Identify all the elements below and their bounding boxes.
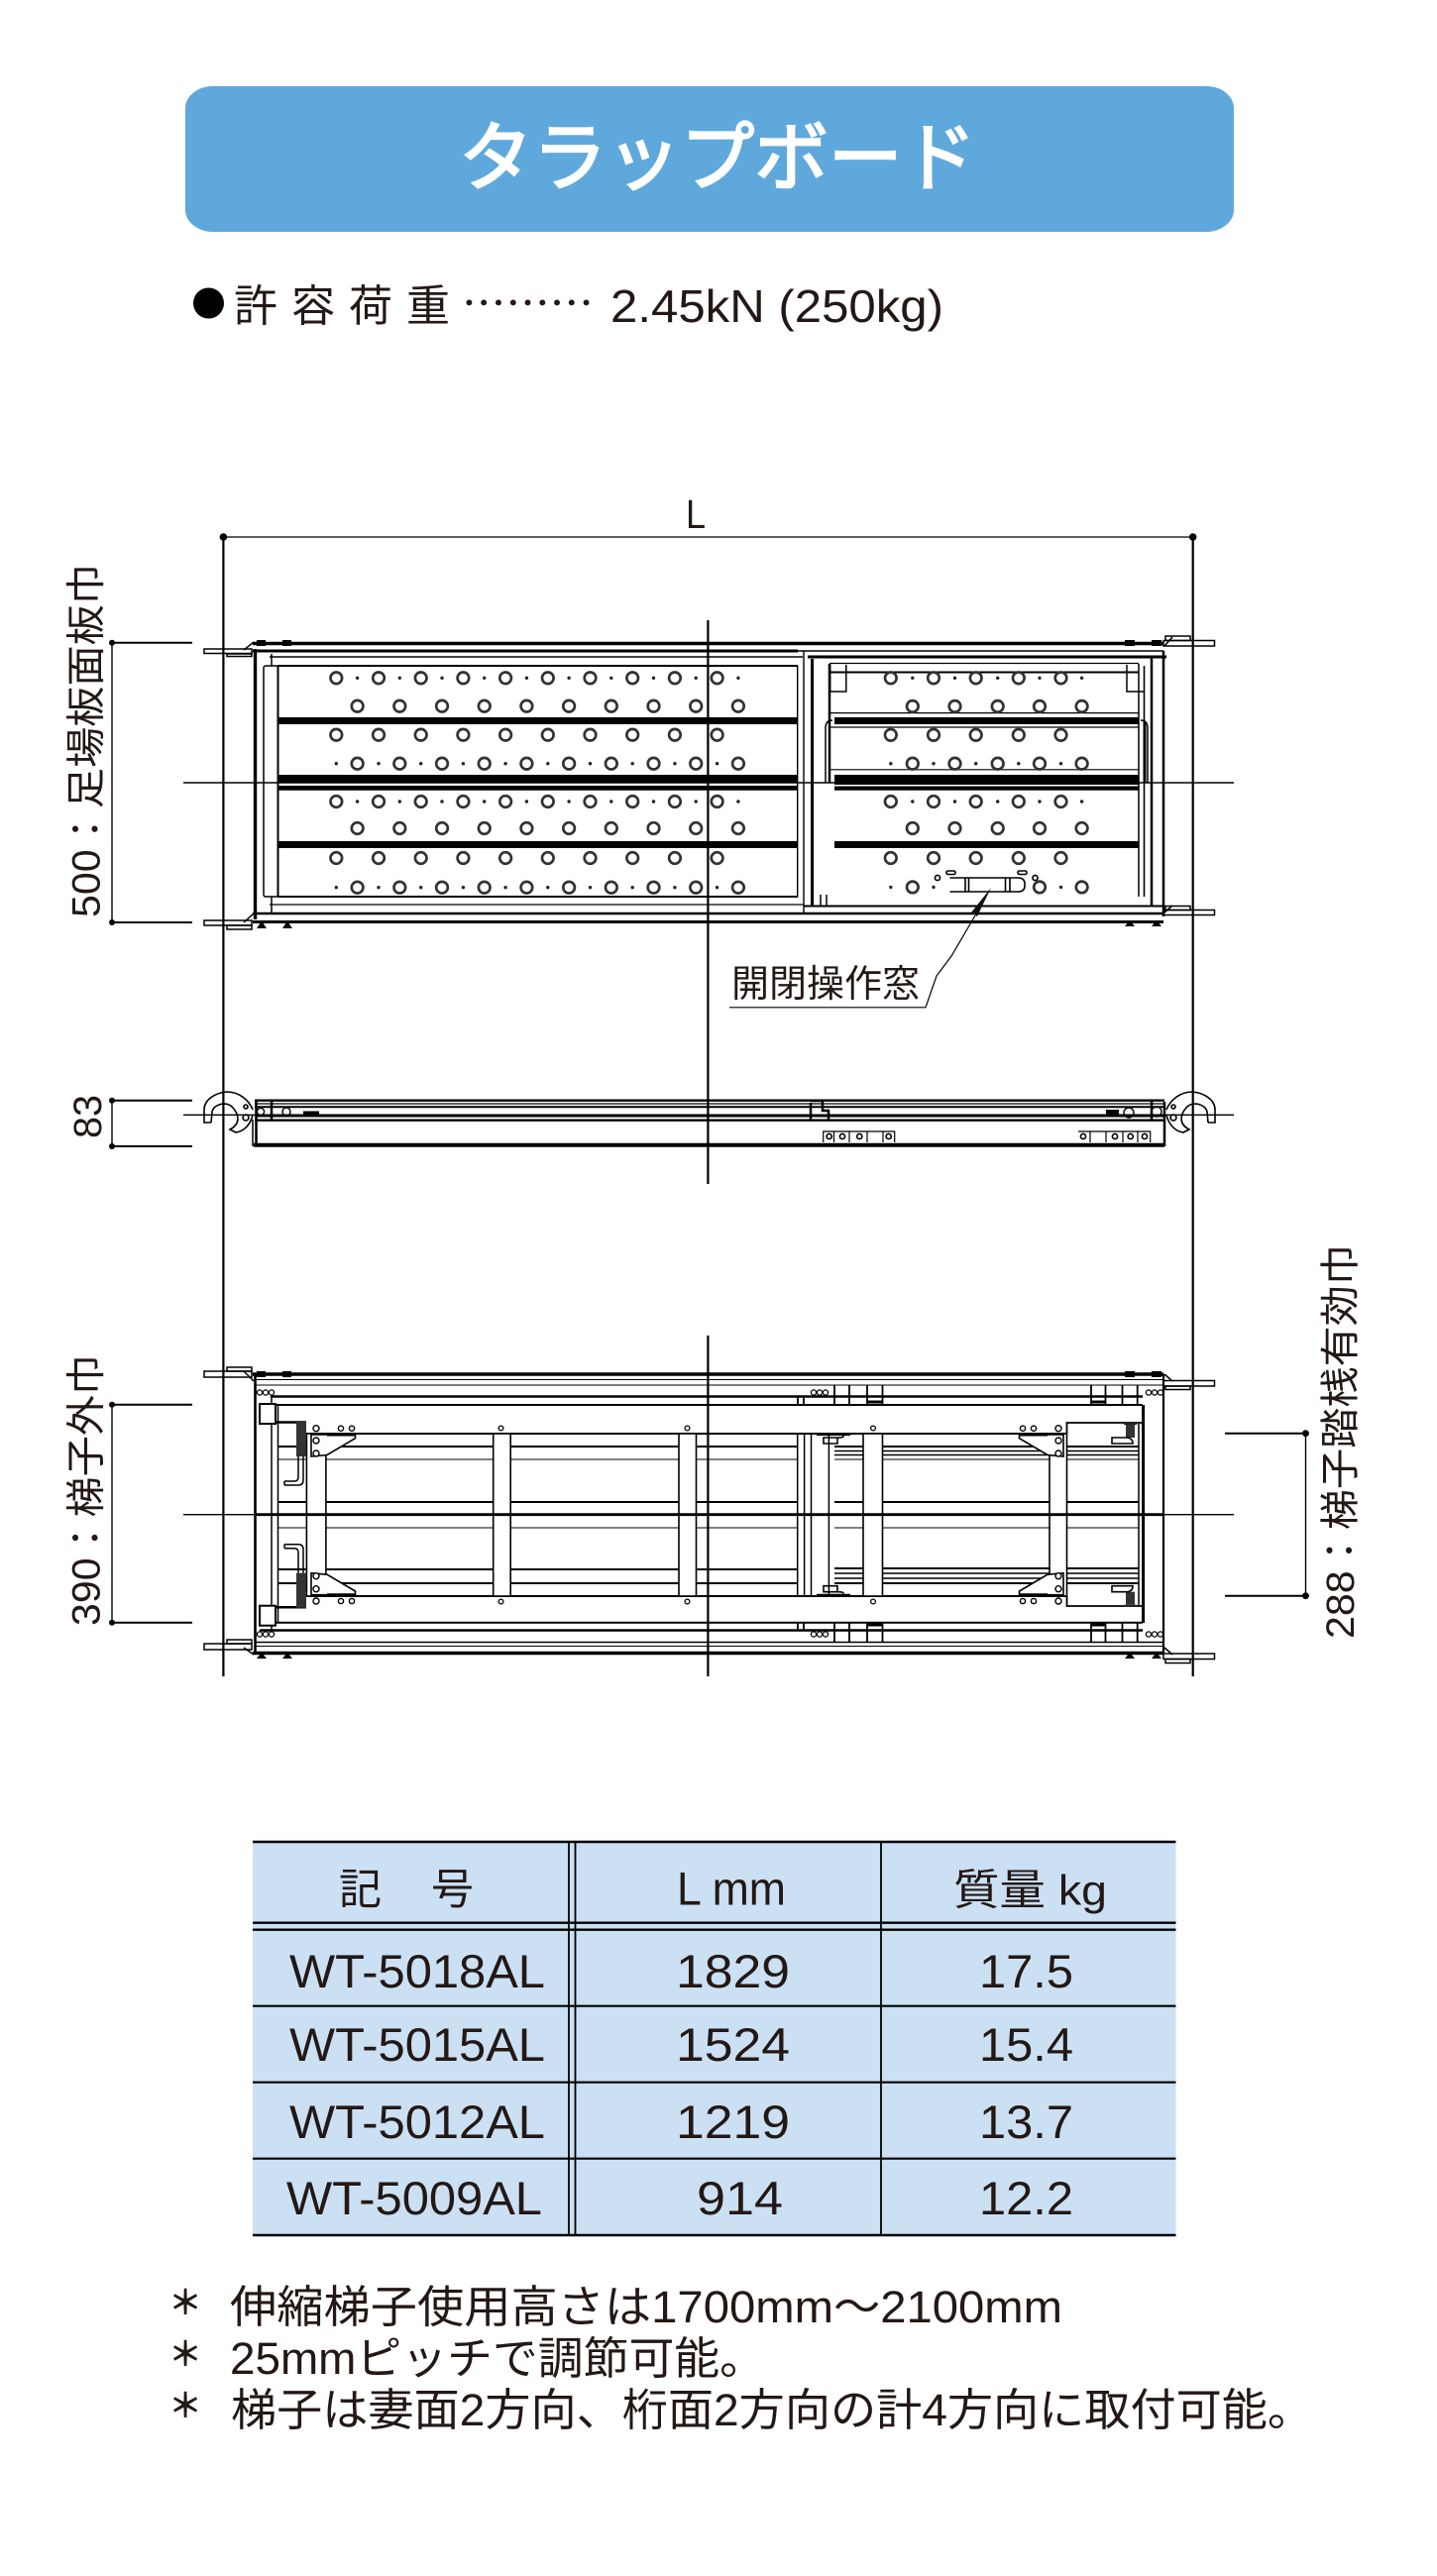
- dimension: 500 board width: [65, 564, 192, 925]
- rungs: [306, 1434, 1066, 1596]
- row WT-5009AL: 914: [697, 2172, 783, 2224]
- opening window: [935, 871, 1038, 892]
- footnotes: ＊: [168, 2336, 202, 2374]
- table header row: 号: [431, 1867, 474, 1914]
- row WT-5012AL: [289, 2095, 1073, 2148]
- title banner: タラップボード: [459, 117, 976, 201]
- dimension: 500 board width: 500：足場板面板巾: [65, 564, 109, 917]
- row WT-5018AL: WT-5018AL: [289, 1945, 545, 1997]
- dimension L: L: [686, 491, 706, 537]
- callout: opening window label: [729, 888, 991, 1008]
- table header row: 質量 kg: [953, 1867, 1107, 1914]
- bottom clamps: [257, 1371, 1161, 1659]
- row WT-5015AL: 1524: [676, 2018, 790, 2071]
- allowable load line: ………: [462, 268, 594, 332]
- side rails: [253, 1100, 1164, 1146]
- allowable load line: [193, 268, 943, 332]
- hook right: [1166, 1092, 1215, 1132]
- row WT-5009AL: WT-5009AL: [286, 2172, 542, 2224]
- allowable load line: 2.45kN (250kg): [610, 280, 943, 332]
- table header row: 記: [339, 1867, 382, 1914]
- ladder centre rail: [256, 1513, 1163, 1516]
- footnotes: 伸縮梯子使用高さは1700mm～2100mm: [230, 2282, 1062, 2332]
- bottom view: ladder: [204, 1367, 1215, 1663]
- rung hole marks: [498, 1426, 875, 1604]
- dimension: 83: [66, 1095, 192, 1149]
- tread holes: right panel: [885, 672, 1087, 893]
- table header row: L mm: [677, 1863, 786, 1914]
- footnotes: 梯子は妻面2方向、桁面2方向の計4方向に取付可能。: [231, 2385, 1313, 2435]
- dimension L: [220, 491, 1196, 541]
- top view: scaffold board: [204, 636, 1215, 1008]
- specification table: [253, 1842, 1175, 2235]
- footnotes: [168, 2282, 1313, 2435]
- row WT-5015AL: 15.4: [979, 2018, 1073, 2071]
- left locks: [260, 1404, 306, 1626]
- dimension: 288 ladder tread width: [1225, 1244, 1363, 1639]
- row WT-5012AL: WT-5012AL: [289, 2095, 545, 2148]
- small dots: [335, 677, 1083, 889]
- row WT-5009AL: [286, 2172, 1073, 2224]
- hook left: [204, 1092, 253, 1132]
- footnotes: ＊: [168, 2285, 202, 2322]
- bottom end tabs: [204, 1367, 1215, 1663]
- row WT-5012AL: 13.7: [979, 2095, 1073, 2148]
- cross band details: [257, 1385, 1163, 1642]
- brackets: [311, 1426, 1063, 1604]
- centre lines: [183, 537, 1234, 1676]
- black tread bars: [278, 717, 1139, 848]
- title banner: [185, 86, 1234, 232]
- footnotes: 25mmピッチで調節可能。: [230, 2333, 765, 2384]
- side view: [204, 1092, 1215, 1146]
- row WT-5015AL: [289, 2018, 1073, 2071]
- row WT-5012AL: 1219: [676, 2095, 790, 2148]
- clamps: [257, 640, 1161, 928]
- row WT-5018AL: 1829: [676, 1945, 790, 1997]
- row WT-5015AL: WT-5015AL: [289, 2018, 545, 2071]
- dimension: 288 ladder tread width: 288：梯子踏桟有効巾: [1319, 1244, 1363, 1639]
- end tabs: [204, 636, 1215, 929]
- row WT-5018AL: 17.5: [979, 1945, 1073, 1997]
- callout: opening window label: 開閉操作窓: [731, 964, 920, 1006]
- row WT-5009AL: 12.2: [979, 2172, 1073, 2224]
- table background: [253, 1842, 1175, 2235]
- allowable load line: 許容荷重: [234, 282, 450, 331]
- right locks: [817, 1424, 1137, 1606]
- table rules: [253, 1842, 1175, 2235]
- side hole plates: [824, 1131, 1151, 1142]
- top view rails and frame: [253, 644, 1166, 921]
- row WT-5018AL: [289, 1945, 1073, 1997]
- table header row: [339, 1863, 1107, 1914]
- dimension: 390 ladder outer width: [65, 1354, 192, 1626]
- footnotes: ＊: [168, 2388, 202, 2425]
- dimension: 83: 83: [66, 1095, 110, 1138]
- tread holes: left panel: [331, 672, 744, 894]
- dimension: 390 ladder outer width: 390：梯子外巾: [65, 1354, 109, 1626]
- bottom view rails: [253, 1374, 1163, 1653]
